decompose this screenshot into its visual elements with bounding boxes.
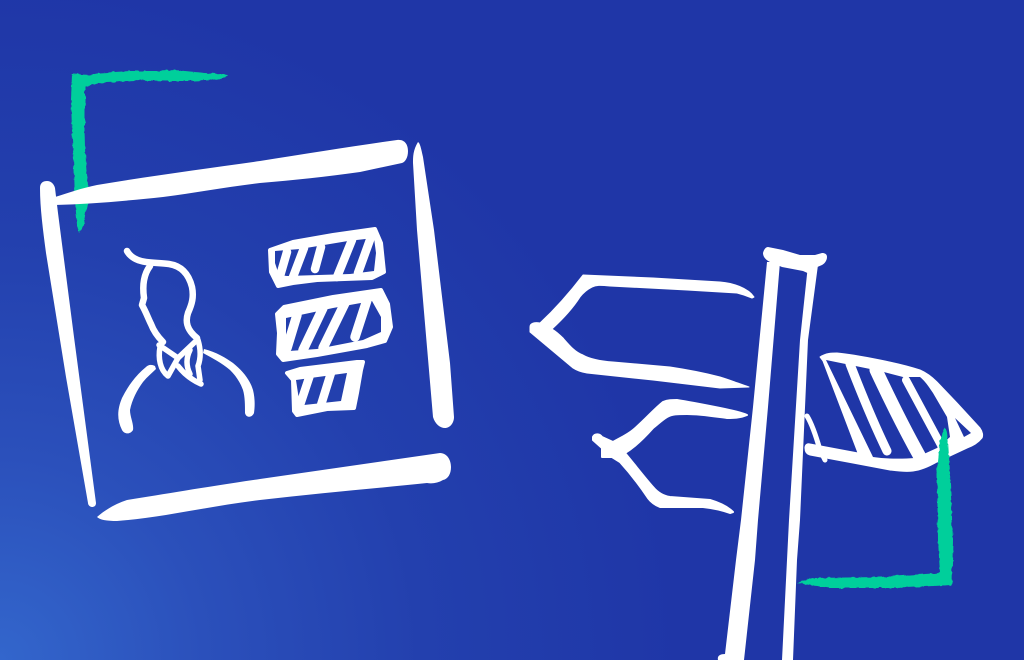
pole: left edge — [718, 262, 780, 660]
hatched bar 1 — [270, 229, 384, 286]
upper left arrow sign — [530, 275, 754, 388]
profile card frame — [40, 140, 454, 521]
frame: bottom stroke — [97, 453, 451, 521]
hatched bar 3 — [287, 362, 363, 415]
sign: outline — [805, 353, 983, 471]
pole: right edge — [782, 265, 818, 660]
left shoulder — [118, 365, 156, 433]
person icon — [118, 251, 255, 433]
hatched bar 2 — [277, 290, 391, 360]
frame: left stroke — [40, 181, 96, 507]
frame: right stroke — [413, 142, 454, 428]
right shoulder — [203, 349, 255, 417]
signpost pole — [718, 247, 827, 660]
shirt collar — [159, 340, 201, 384]
sign: small stub behind — [807, 416, 825, 460]
sign: tip gap — [955, 418, 971, 437]
sign: interior gaps — [826, 360, 950, 459]
right hatched arrow sign — [805, 353, 983, 471]
lower left arrow sign — [593, 400, 747, 513]
hair and face outline — [127, 251, 197, 342]
frame: top stroke — [55, 140, 408, 205]
sign: hatching — [850, 364, 942, 457]
pole: top cap — [763, 247, 827, 275]
green bracket: bottom right — [797, 427, 953, 588]
green bracket: top left — [71, 70, 228, 233]
